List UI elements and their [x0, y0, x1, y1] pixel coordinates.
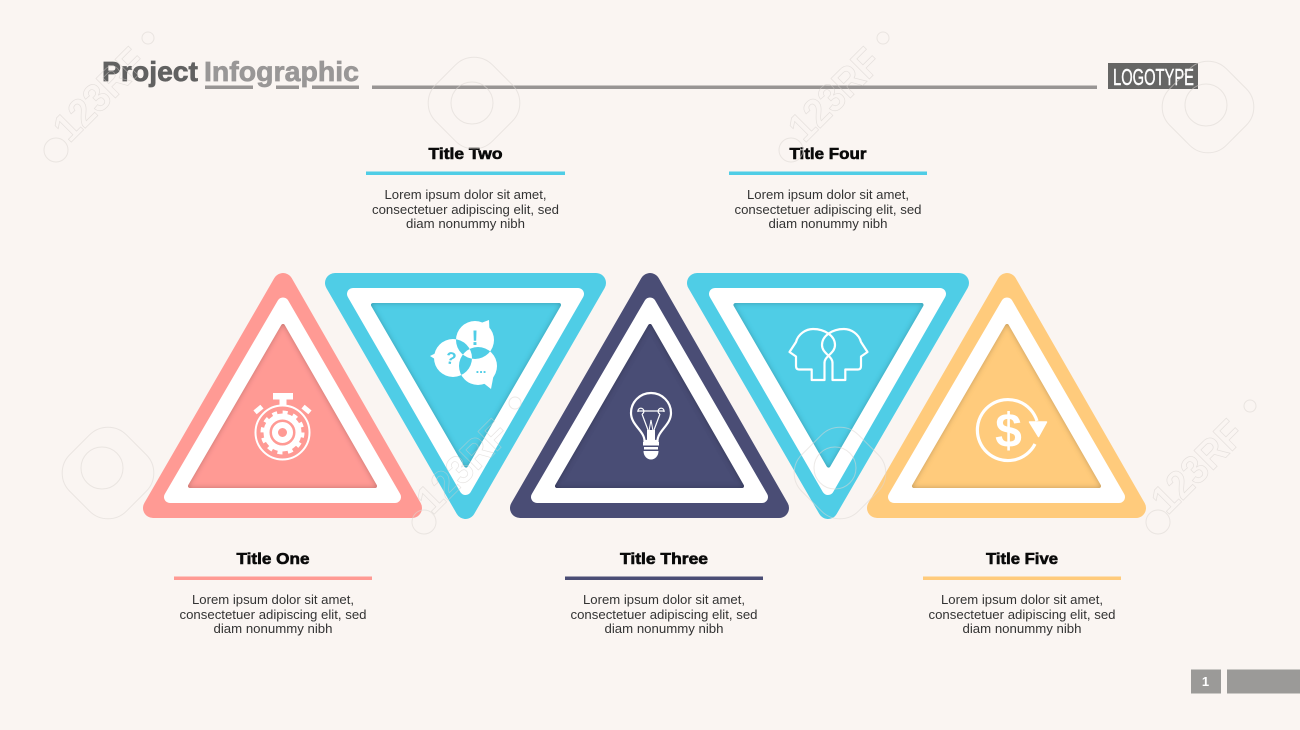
panel: title four text: diam nonummy nibh [768, 216, 888, 231]
panel: title three text: Title Three [620, 551, 708, 568]
panel: title three text [565, 551, 763, 636]
triangle five [877, 283, 1136, 508]
panel: title five text: consectetuer adipiscing elit, sed [928, 607, 1116, 622]
icon: speech bubbles: ... [476, 361, 486, 376]
panel: title one text [174, 551, 372, 636]
icon: speech bubbles: ! [472, 327, 478, 350]
panel: title five text: diam nonummy nibh [962, 621, 1082, 636]
panel: title three text: Lorem ipsum dolor sit amet, [583, 592, 745, 607]
panel: title five text: Lorem ipsum dolor sit amet, [941, 592, 1103, 607]
page number [1191, 670, 1300, 694]
triangle four [697, 283, 959, 509]
panel: title three text: diam nonummy nibh [604, 621, 724, 636]
panel: title four text: Title Four [790, 146, 866, 163]
icon: two heads [790, 329, 868, 380]
watermark stamps: 123RF [408, 412, 518, 522]
panel: title one text: Title One [236, 551, 310, 568]
watermark stamps: 123RF [1143, 412, 1253, 522]
panel: title two text: Title Two [428, 146, 503, 163]
icon: speech bubbles [430, 320, 497, 389]
panel: title four text [729, 146, 927, 231]
panel: title four text: consectetuer adipiscing elit, sed [734, 202, 922, 217]
triangle three [520, 283, 779, 508]
panel: title five text: Title Five [986, 551, 1058, 568]
icon: light bulb [631, 393, 671, 460]
title: Project [102, 56, 198, 87]
panel: title two text: diam nonummy nibh [406, 216, 525, 231]
title [102, 56, 359, 89]
panel: title one text: consectetuer adipiscing elit, sed [180, 607, 366, 622]
page number: 1 [1202, 674, 1209, 689]
title: Infographic [204, 56, 359, 87]
watermark stamps: 123RF [780, 40, 890, 150]
watermark stamps [44, 32, 1265, 534]
panel: title one text: Lorem ipsum dolor sit amet, [192, 592, 354, 607]
triangle two [335, 283, 596, 509]
panel: title two text [366, 146, 565, 231]
logotype: LOGOTYPE [1113, 64, 1194, 90]
header rule [372, 86, 1097, 89]
panel: title four text: Lorem ipsum dolor sit amet, [747, 187, 909, 202]
icon: dollar refresh [977, 400, 1046, 461]
panel: title one text: diam nonummy nibh [214, 621, 332, 636]
icon: speech bubbles: ? [444, 348, 458, 369]
panel: title two text: consectetuer adipiscing elit, sed [372, 202, 559, 217]
panel: title two text: Lorem ipsum dolor sit amet, [384, 187, 546, 202]
watermark stamps: 123RF [45, 40, 155, 150]
icon: stopwatch gear [253, 393, 312, 460]
icon: dollar refresh: $ [995, 405, 1022, 458]
logotype [1108, 63, 1198, 90]
triangle one [153, 283, 412, 508]
panel: title five text [923, 551, 1121, 636]
panel: title three text: consectetuer adipiscing elit, sed [570, 607, 758, 622]
